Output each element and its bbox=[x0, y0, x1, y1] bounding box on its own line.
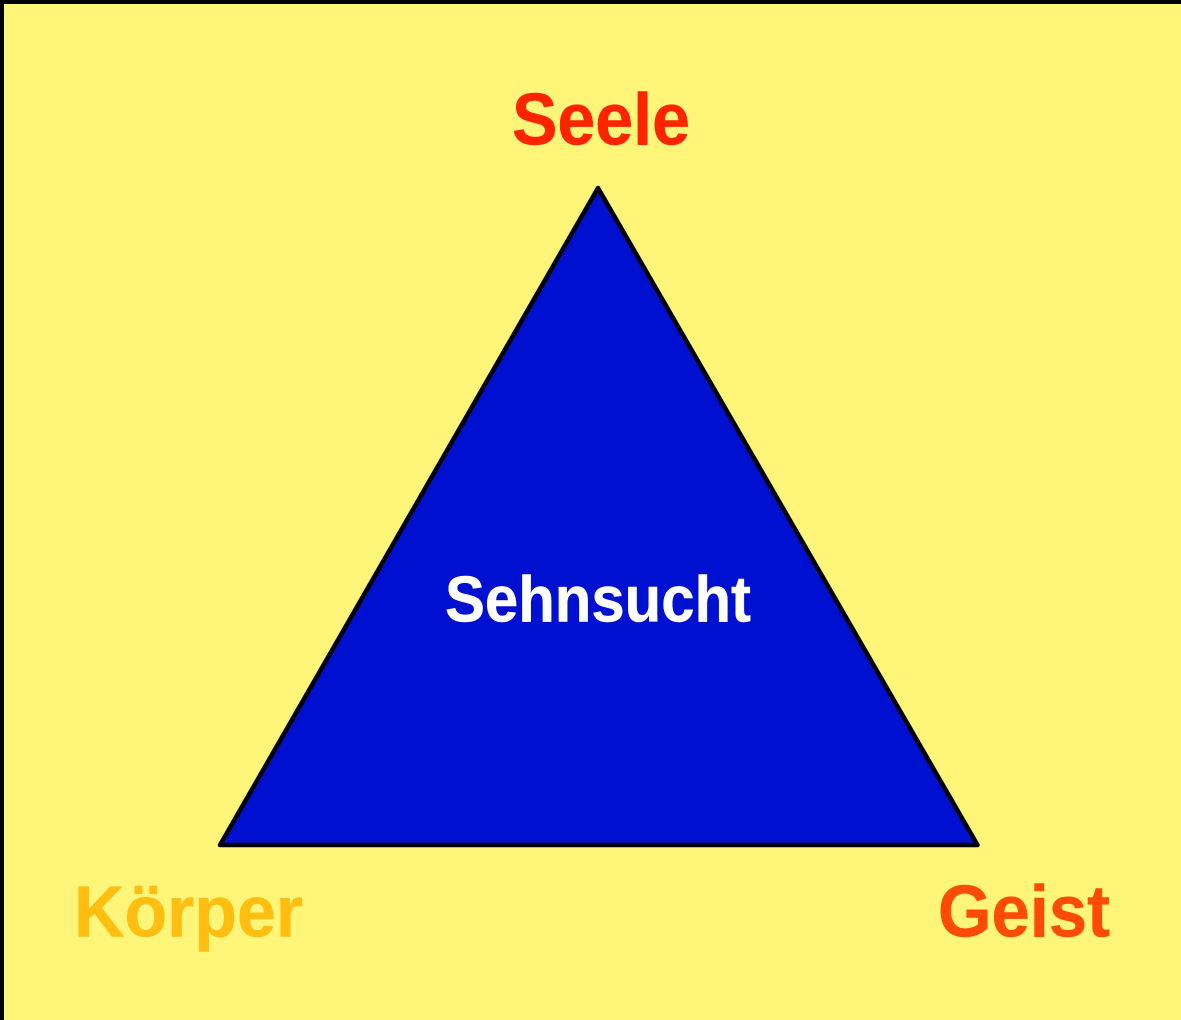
label: Körper: Körper bbox=[74, 872, 303, 952]
label: Geist: Geist bbox=[938, 872, 1110, 952]
label: Sehnsucht: Sehnsucht bbox=[445, 562, 751, 636]
triangle bbox=[220, 188, 978, 845]
label: Seele: Seele bbox=[512, 80, 690, 160]
